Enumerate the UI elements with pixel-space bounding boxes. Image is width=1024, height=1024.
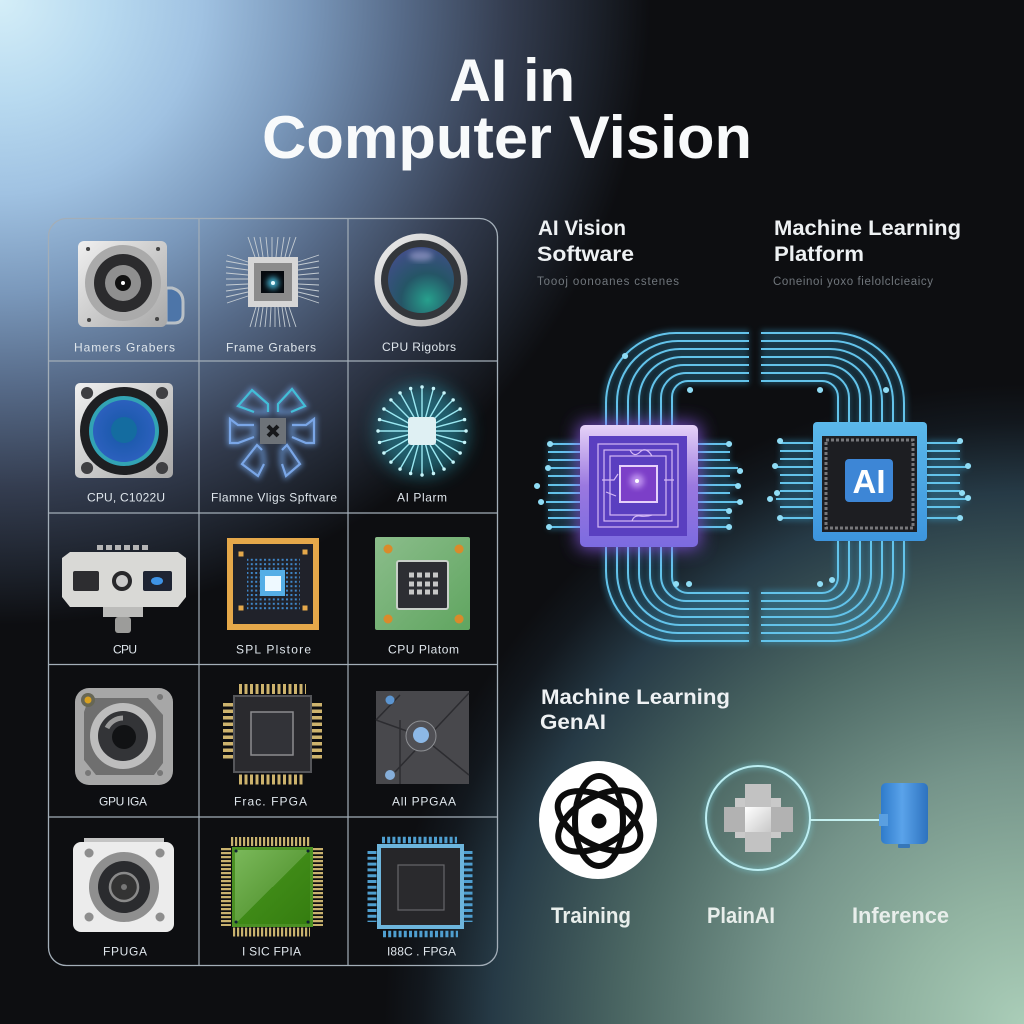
label: CPU Rigobrs: CPU Rigobrs: [382, 340, 456, 354]
icon: frame grabber chip: [226, 237, 319, 327]
icon: grey node plate: [376, 691, 469, 784]
icon: PlainAI node: [706, 766, 810, 870]
diagram: connected chips: [537, 333, 968, 641]
label: Hamers Grabers: Hamers Grabers: [74, 340, 175, 354]
connector line: [810, 819, 881, 821]
icon: lens: [374, 234, 468, 326]
label: Training: Training: [551, 903, 631, 928]
heading: Machine Learning GenAI: [540, 686, 730, 734]
icon: blue speaker camera: [75, 383, 173, 478]
icon: gold pin chip: [228, 689, 317, 780]
chip: AI processor: [813, 422, 927, 541]
label: Flamne Vligs Spftvare: Flamne Vligs Spftvare: [211, 490, 337, 504]
label: Frame Grabers: Frame Grabers: [226, 340, 316, 354]
heading: Machine Learning Platform: Platform: [774, 243, 864, 266]
heading: Machine Learning GenAI: GenAI: [540, 711, 606, 734]
label: SPL Plstore: SPL Plstore: [236, 642, 311, 656]
icon: white box camera: [73, 838, 174, 932]
icon: blue FPGA chip: [372, 840, 468, 934]
caption: platform: Coneinoi yoxo fielolclcieaicy: [773, 276, 933, 288]
label: GPU IGA: GPU IGA: [99, 794, 147, 808]
label: I88C . FPGA: I88C . FPGA: [387, 944, 456, 958]
icon: training logo: [539, 761, 657, 879]
title: [262, 47, 752, 171]
circuit traces: [537, 333, 968, 641]
label: AI Plarm: AI Plarm: [397, 490, 447, 504]
heading: AI Vision Software: AI Vision: [538, 217, 626, 240]
heading: AI Vision Software: Software: [537, 243, 634, 266]
icon: green FPGA chip: [226, 842, 318, 932]
heading: Machine Learning GenAI: Machine Learning: [541, 686, 730, 709]
icon: green board chip: [375, 537, 470, 630]
label: Frac. FPGA: Frac. FPGA: [234, 794, 307, 808]
caption: software: Toooj oonoanes cstenes: [537, 276, 679, 288]
chip: purple processor: [578, 423, 700, 549]
title: AI in: [449, 47, 575, 114]
chip: AI processor: AI: [852, 463, 886, 500]
icon: inference cylinder: [879, 783, 928, 848]
title: Computer Vision: [262, 104, 752, 171]
label: CPU: CPU: [113, 642, 137, 656]
icon: grey industrial camera: [75, 688, 173, 785]
icon: glowing vision symbol: [230, 389, 314, 476]
heading: Machine Learning Platform: Machine Learning: [774, 217, 961, 240]
heading: AI Vision Software: [537, 217, 634, 266]
icon: camera module 1: [78, 241, 183, 327]
label: Inference: Inference: [852, 903, 949, 928]
label: CPU, C1022U: CPU, C1022U: [87, 490, 165, 504]
label: FPUGA: FPUGA: [103, 944, 147, 958]
label: I SIC FPIA: I SIC FPIA: [242, 944, 301, 958]
icon: AI radial chip: [376, 385, 468, 477]
panel: hardware grid: [48, 218, 498, 966]
label: PlainAI: PlainAI: [707, 903, 775, 928]
icon: gold framed processor: [227, 538, 319, 630]
label: All PPGAA: All PPGAA: [392, 794, 456, 808]
heading: Machine Learning Platform: [774, 217, 961, 266]
icon: stereo camera: [62, 548, 186, 633]
label: CPU Platom: CPU Platom: [388, 642, 459, 656]
